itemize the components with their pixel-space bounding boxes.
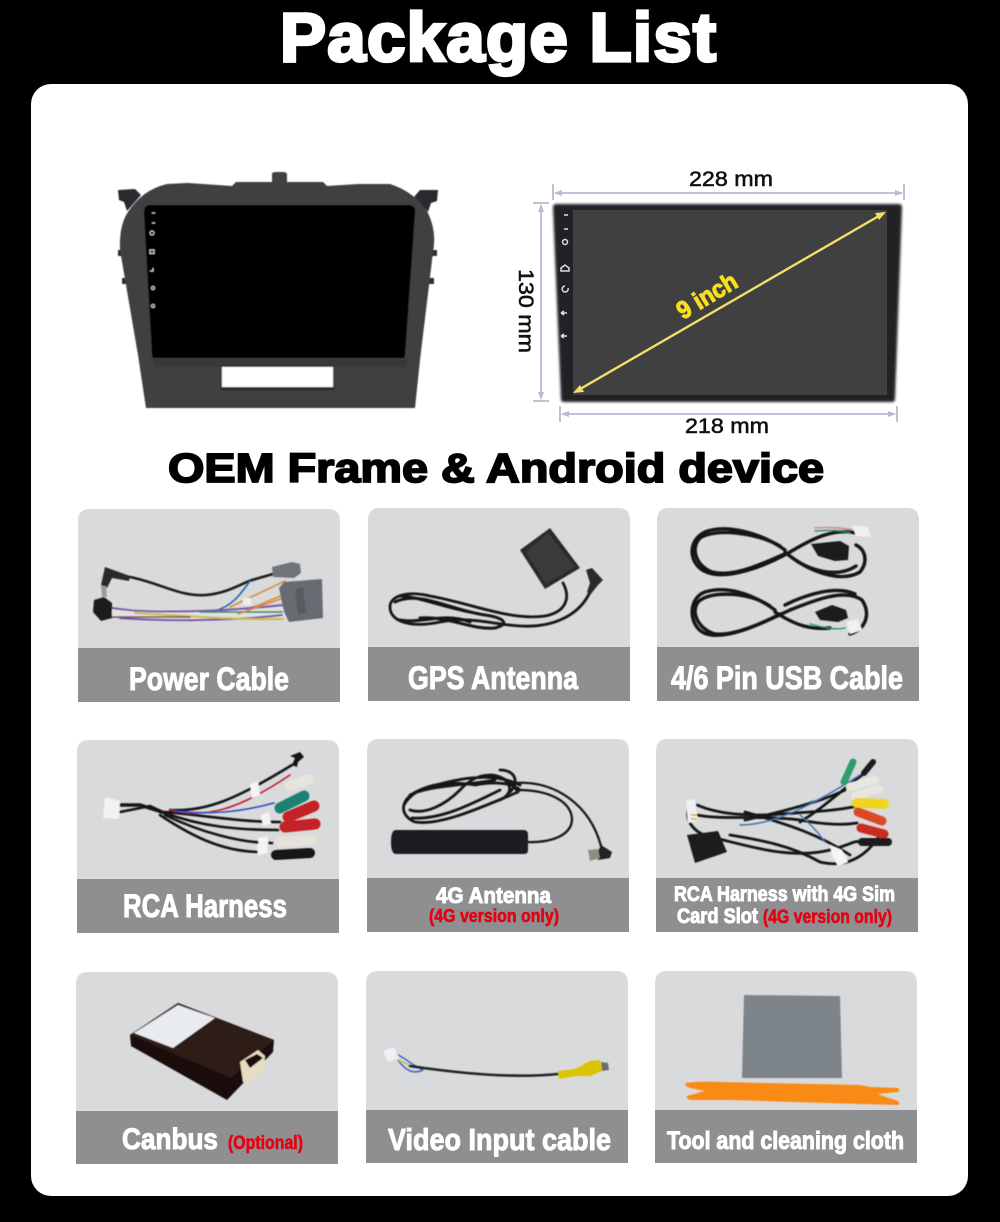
label line 2: Card Slot [677,905,758,928]
card: canbus [76,972,338,1164]
dimension diagram [514,168,904,438]
height label: 130 mm [514,269,537,353]
icon: USB cables [692,525,871,635]
device body [553,204,902,402]
card: tool and cleaning cloth [655,971,917,1163]
head unit with OEM frame [118,172,438,408]
label: Tool and cleaning cloth [667,1127,904,1155]
card: GPS antenna [368,508,630,701]
icon: canbus box [130,1003,274,1100]
section heading: OEM Frame & Android device [168,445,824,491]
frame ears [118,189,438,212]
label: Video Input cable [388,1122,611,1157]
label: 4/6 Pin USB Cable [671,660,903,696]
card: 4G antenna [367,739,629,932]
icon: power cable [93,562,323,622]
frame body [120,172,434,408]
card: RCA harness [77,740,339,933]
label red note: (4G version only) [763,907,892,928]
card: video input [366,971,628,1163]
frame window [222,367,333,387]
card: USB cable [657,508,919,701]
title: Package List [280,0,716,76]
icon: pry tool [685,1082,900,1105]
diagonal size label: 9 inch [672,267,743,325]
icon: GPS antenna [390,528,603,628]
device screen [573,210,887,395]
label red note: (Optional) [228,1133,303,1154]
screen [144,205,415,358]
label line 2: (4G version only) [429,906,559,926]
card: power cable [78,509,340,702]
frame lower shading [152,358,408,367]
diagonal arrow [573,212,886,393]
icon: video cable [383,1047,609,1079]
label: Canbus [122,1123,218,1156]
frame side tabs [118,250,437,284]
bottom width label: 218 mm [685,415,769,438]
width arrow top [553,184,904,200]
label: Power Cable [129,661,289,697]
icon: RCA harness [103,752,315,855]
width arrow bottom [560,406,897,422]
label line 1: 4G Antenna [436,883,552,908]
icon: RCA harness with 4G [686,762,888,866]
label line 1: RCA Harness with 4G Sim [674,883,895,906]
label: RCA Harness [123,888,287,924]
label: GPS Antenna [408,660,578,696]
icon: cleaning cloth [742,995,842,1078]
card: RCA harness with 4G [656,739,918,932]
icon: 4G antenna [391,770,612,861]
height arrow left [533,203,549,401]
screen side icons [150,213,155,308]
top width label: 228 mm [689,168,773,191]
device side icons [561,215,569,338]
